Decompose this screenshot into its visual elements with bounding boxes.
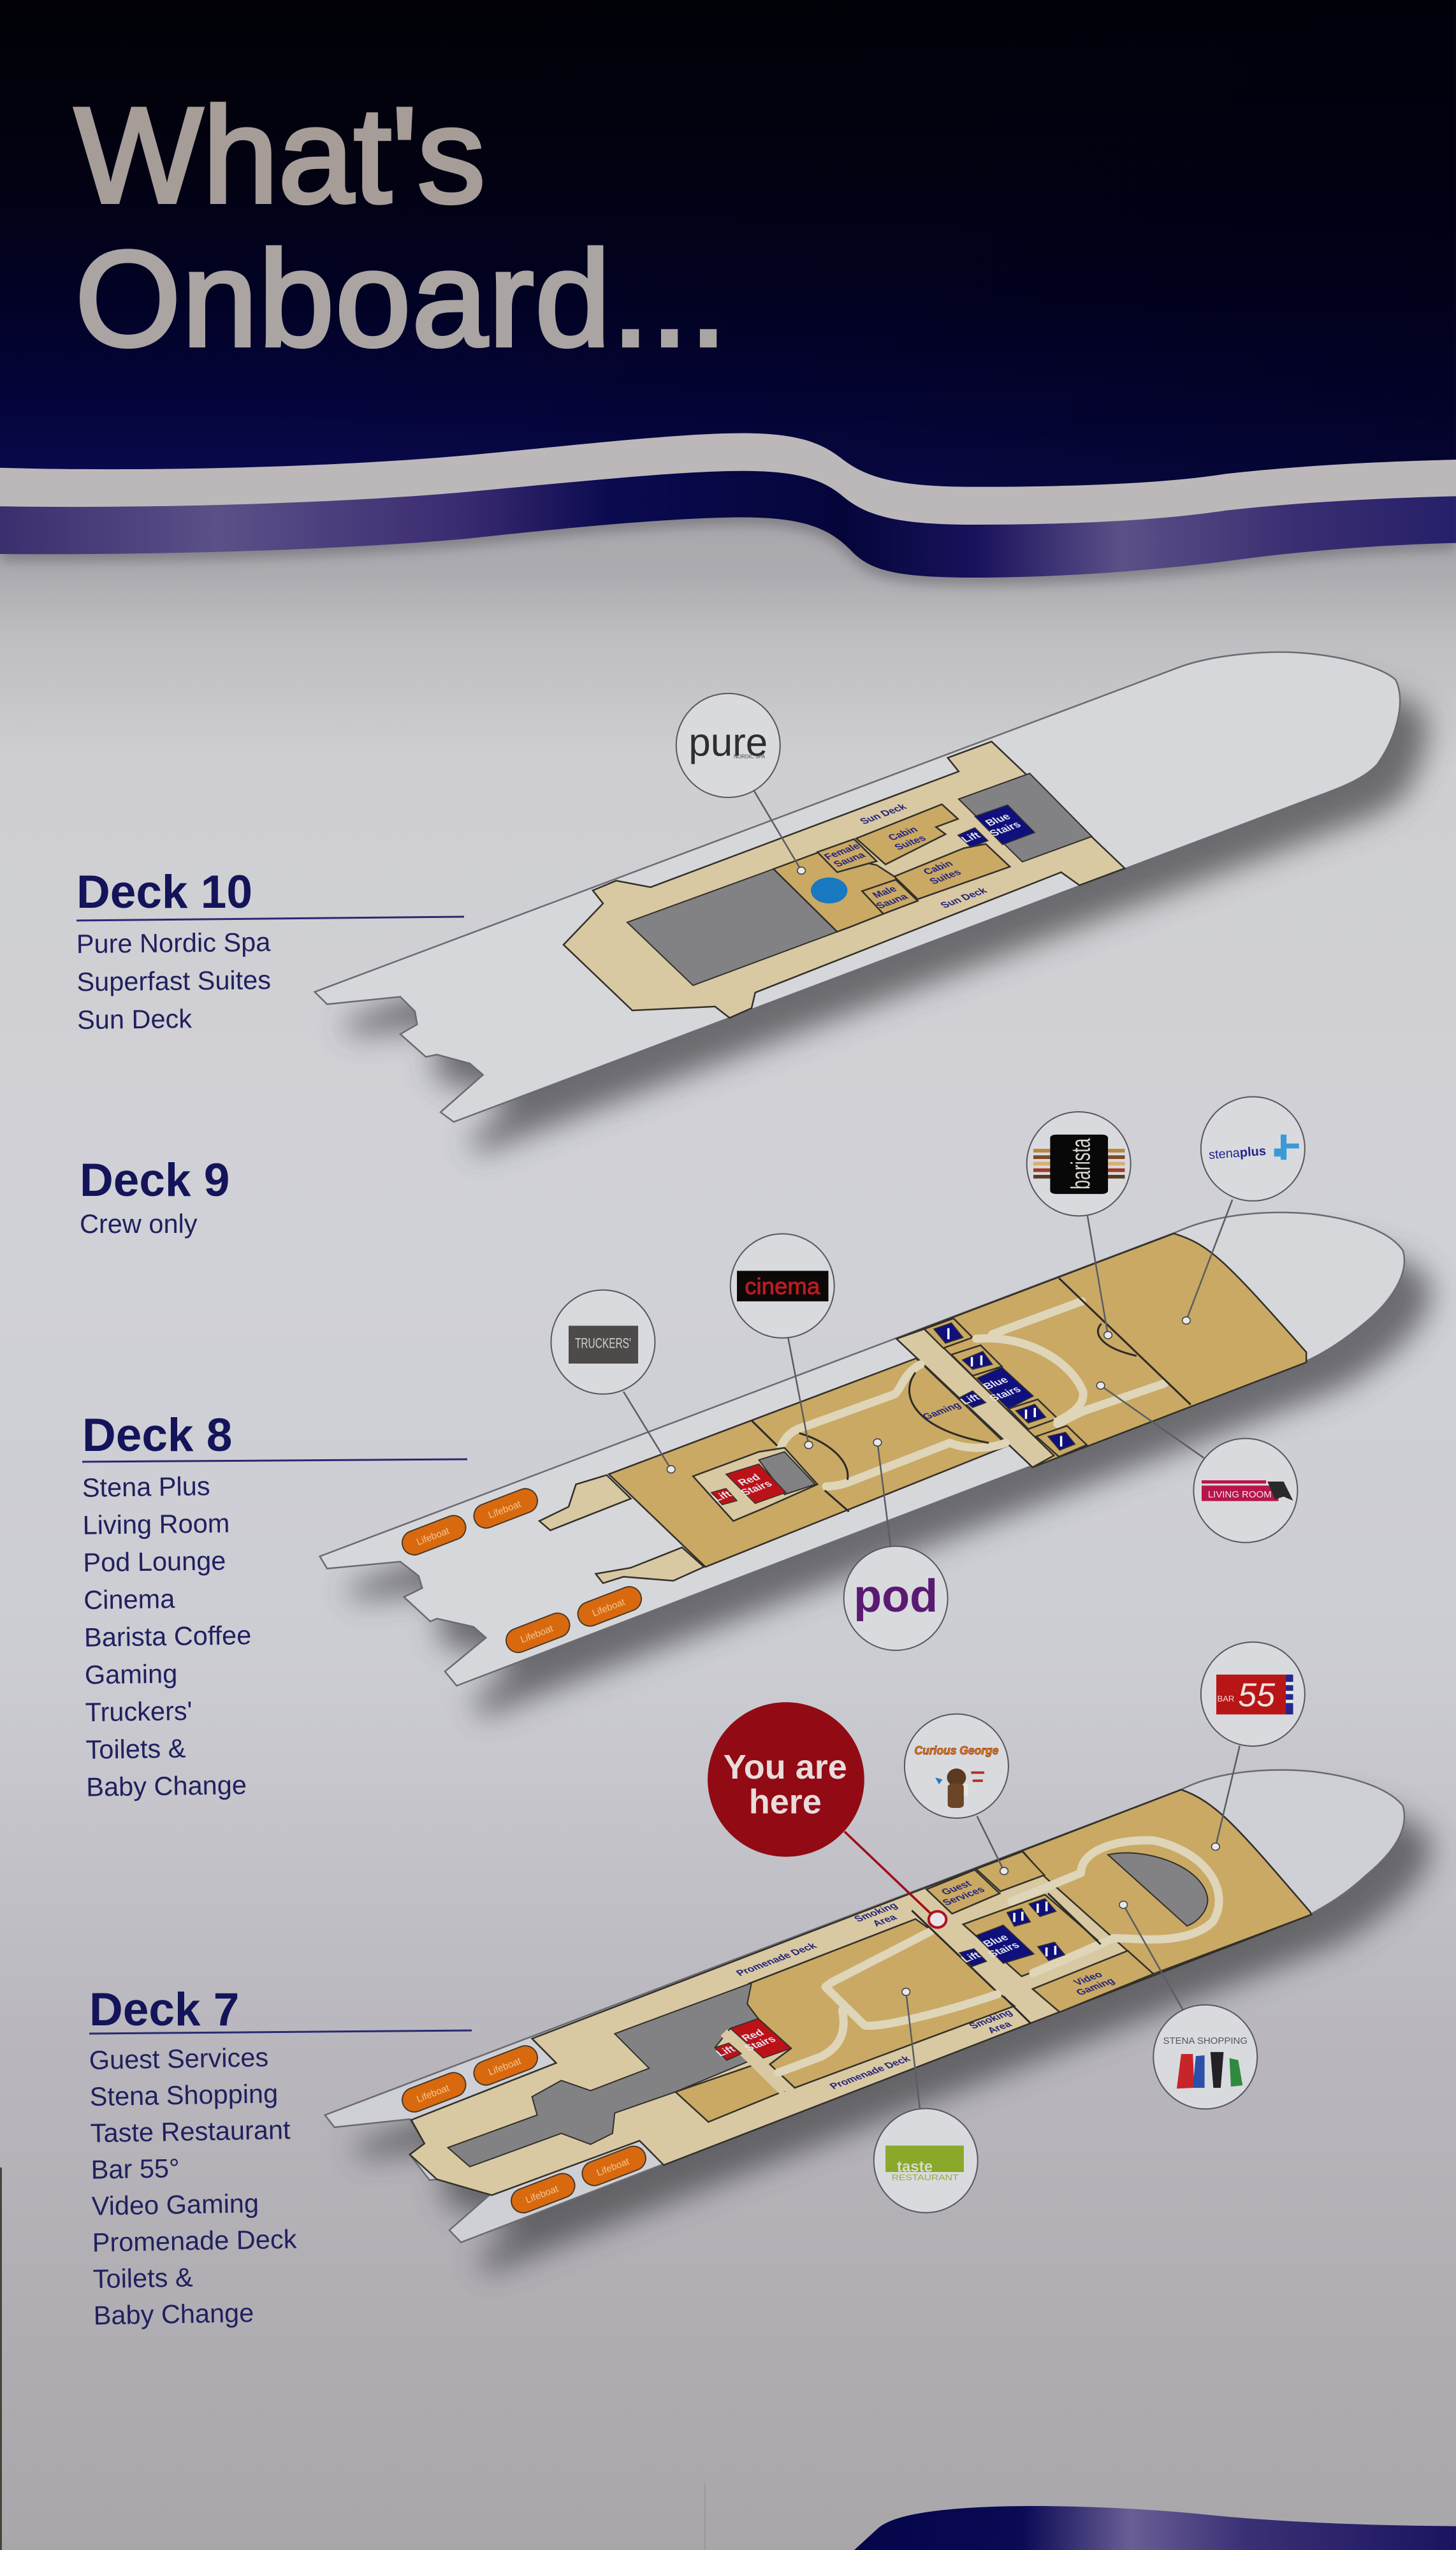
red stairs: Stairs (741, 2034, 778, 2053)
room: cabin suites upper: Cabin (886, 825, 921, 843)
room: female sauna (817, 839, 877, 872)
callout: stena plus: stenaplus (1208, 1144, 1267, 1162)
room: cabin suites upper: Suites (892, 834, 929, 852)
walkways (781, 1301, 1164, 1487)
list: Deck 8 facilities: Gaming (85, 1658, 178, 1689)
lifeboat 4 (574, 1583, 645, 1629)
callout: curious george (905, 1714, 1008, 1818)
heading: Deck 9: Deck 9 (80, 1155, 229, 1206)
icon: toilets 2 (963, 1352, 993, 1369)
icon: toilets 1 (934, 1323, 963, 1343)
void (448, 1983, 758, 2167)
room: curious george (976, 1851, 1044, 1891)
label: sun deck north: Sun Deck (858, 803, 909, 826)
callout: barista: barista (1065, 1138, 1095, 1190)
void: main (627, 869, 837, 986)
leader: pure (753, 790, 801, 871)
list: Deck 8 facilities: Toilets & (85, 1733, 186, 1765)
lifeboat 4 (579, 2143, 650, 2189)
blue stairs (977, 1367, 1033, 1409)
callout: pod (844, 1546, 948, 1650)
blue stairs (975, 805, 1035, 845)
list: Deck 7 facilities: Taste Restaurant (90, 2115, 291, 2148)
blue stairs: Stairs (986, 1940, 1022, 1959)
callout: you are here: here (749, 1782, 822, 1821)
cross corridor (896, 1329, 1054, 1468)
leader lines (906, 1745, 1240, 2109)
callout: you are here: You are (724, 1748, 847, 1786)
deck structure (410, 1789, 1311, 2195)
label: promenade deck north: Promenade Deck (734, 1941, 819, 1978)
list: Deck 7 facilities: Stena Shopping (89, 2078, 278, 2111)
lifeboat 2 (470, 2043, 541, 2088)
heading: Deck 8: Deck 8 (82, 1410, 232, 1461)
callout: stena plus (1201, 1096, 1305, 1201)
lifeboat 1: Lifeboat (415, 1526, 451, 1548)
room: male sauna: Male (870, 885, 899, 900)
list: Deck 8 facilities: Cinema (84, 1584, 175, 1615)
lifeboat 3: Lifeboat (524, 2183, 560, 2206)
lifeboat 1 (398, 2069, 469, 2115)
list: Deck 8 facilities: Truckers' (85, 1696, 193, 1727)
list: Deck 7 facilities: Video Gaming (91, 2188, 259, 2221)
red stairs: Red (739, 2027, 767, 2043)
lifeboat 3 (507, 2170, 578, 2217)
deck 7 plan (325, 1642, 1431, 2273)
callout: stena shopping (1153, 2005, 1257, 2109)
red stairs (731, 2019, 791, 2058)
lift: Lift (959, 1950, 983, 1964)
lifeboat 1: Lifeboat (415, 2082, 451, 2105)
callout: bar 55: BAR (1218, 1694, 1234, 1703)
lift (958, 827, 988, 847)
blue stairs: Stairs (987, 1384, 1024, 1403)
icon: toilets 3 (1016, 1404, 1045, 1423)
room: guest services: Guest (939, 1879, 975, 1897)
list: Deck 10 facilities: Pure Nordic Spa (76, 927, 271, 959)
list: Deck 7 facilities: Toilets & (92, 2262, 193, 2294)
list: Deck 10 facilities: Superfast Suites (76, 965, 271, 996)
room: guest services (926, 1870, 1000, 1914)
list: Deck 7 facilities: Baby Change (93, 2298, 254, 2330)
label: smoking area south: Area (986, 2020, 1014, 2036)
icon: toilets 2 (1029, 1898, 1056, 1916)
callout: curious george: Curious George (914, 1744, 998, 1757)
title: Onboard... (75, 223, 728, 375)
void: forward (959, 773, 1092, 862)
list: Deck 8 facilities: Stena Plus (82, 1471, 210, 1503)
icon: toilets 1 (1007, 1909, 1030, 1927)
red stairs (726, 1464, 786, 1503)
toilet boxes (924, 1318, 1087, 1457)
lift: Lift (958, 1392, 982, 1406)
callout: bar 55 (1201, 1642, 1305, 1746)
lifeboat 2: Lifeboat (487, 2055, 523, 2078)
aft deck side upper (539, 1475, 631, 1531)
partitions (752, 1278, 1191, 1512)
walkways (778, 1840, 1219, 2073)
room: video gaming (1033, 1951, 1153, 2012)
room: male sauna: Sauna (874, 892, 910, 910)
title (75, 80, 728, 375)
leader lines (623, 1200, 1232, 1547)
callout: bar 55: 55 (1238, 1677, 1276, 1714)
lifeboat 3: Lifeboat (519, 1623, 555, 1645)
list: Deck 8 facilities: Barista Coffee (84, 1620, 252, 1652)
blue stairs (975, 1925, 1034, 1963)
red lift: Lift (713, 2044, 738, 2058)
red stairs: Red (735, 1472, 763, 1488)
room: female sauna: Female (822, 841, 863, 862)
room: guest services: Services (940, 1885, 987, 1907)
room: video gaming: Video (1072, 1970, 1105, 1988)
markers (902, 1843, 1219, 1995)
markers (667, 1317, 1190, 1473)
floor forward (896, 1234, 1306, 1468)
callout: pod: pod (854, 1571, 938, 1622)
room: cabin suites lower (894, 844, 1010, 900)
callout: you are here (708, 1702, 946, 1928)
room: female sauna: Sauna (832, 850, 868, 869)
icon: spa pool (811, 877, 847, 903)
heading: Deck 10: Deck 10 (76, 866, 252, 918)
floor: restaurant (747, 1919, 1014, 2088)
list: Deck 10 facilities: Sun Deck (77, 1003, 193, 1035)
deck 10 plan (315, 652, 1427, 1153)
blue stairs: Stairs (987, 819, 1024, 838)
heading: Deck 7: Deck 7 (89, 1984, 239, 2036)
room: video gaming: Gaming (1074, 1976, 1117, 1997)
lifeboat 4: Lifeboat (591, 1596, 627, 1619)
icon: toilets 3 (1038, 1942, 1065, 1960)
blue stairs: Blue (982, 812, 1013, 828)
aft deck side lower (595, 1547, 704, 1583)
red stairs: Stairs (738, 1478, 775, 1497)
header band (0, 0, 1456, 585)
callout: pure: pure (688, 721, 768, 765)
floor: lower block (676, 2064, 783, 2122)
hull: deck 7 (325, 1770, 1404, 2242)
label: promenade deck south: Promenade Deck (827, 2055, 913, 2091)
label: smoking area north: Smoking (852, 1901, 900, 1924)
lifeboat 3 (502, 1610, 573, 1656)
callout: truckers (551, 1290, 655, 1394)
blue stairs: Blue (980, 1374, 1011, 1392)
callout: taste restaurant (874, 2109, 978, 2213)
toilet block (963, 1895, 1102, 1976)
deck 8 plan (320, 1096, 1431, 1716)
list: Deck 7 facilities: Bar 55° (91, 2153, 180, 2185)
callout: living room: LIVING ROOM (1208, 1489, 1272, 1500)
callout: taste restaurant: RESTAURANT (892, 2173, 959, 2182)
title: What's (75, 80, 485, 231)
bottom ribbon (854, 2506, 1456, 2550)
void: bow half circle (1108, 1853, 1207, 1926)
room: cabin suites lower: Suites (928, 868, 964, 886)
spa floor (773, 853, 916, 932)
callout: cinema (731, 1234, 834, 1338)
list: Deck 8 facilities: Pod Lounge (83, 1545, 226, 1577)
lifeboat 2 (470, 1485, 541, 1531)
red lift: Lift (710, 1489, 734, 1503)
callout: living room (1193, 1438, 1297, 1543)
callout: stena shopping: STENA SHOPPING (1163, 2036, 1248, 2046)
list: Deck 8 facilities: Baby Change (86, 1770, 247, 1802)
marker: pure (797, 867, 805, 874)
label: smoking area north: Area (870, 1913, 899, 1928)
callout: barista (1027, 1112, 1131, 1216)
room: cabin suites upper (856, 805, 958, 864)
list: Deck 8 facilities: Living Room (82, 1508, 230, 1540)
label: sun deck south: Sun Deck (938, 886, 989, 910)
partitions (912, 1893, 1101, 2023)
callout: cinema: cinema (745, 1273, 820, 1299)
hull: deck 8 (320, 1213, 1404, 1686)
icon: toilets 4 (1048, 1432, 1075, 1450)
lifeboat 1 (398, 1512, 469, 1559)
label: smoking area south: Smoking (967, 2008, 1015, 2031)
label: gaming: Gaming (921, 1401, 964, 1422)
floor: bow (1023, 1789, 1311, 1974)
hull: deck 10 (315, 652, 1400, 1122)
lift: Lift (959, 830, 983, 845)
text: crew only: Crew only (80, 1209, 198, 1239)
callout: truckers: TRUCKERS' (575, 1336, 631, 1352)
lifeboat 4: Lifeboat (595, 2156, 631, 2178)
core: void (759, 1452, 815, 1494)
lifeboat 2: Lifeboat (487, 1498, 523, 1521)
room: cabin suites lower: Cabin (921, 859, 956, 877)
deck structure (564, 741, 1125, 1018)
room: male sauna (862, 880, 918, 914)
beige bar (724, 2032, 783, 2092)
blue stairs: Blue (980, 1932, 1011, 1949)
core: beige (693, 1448, 817, 1521)
list: Deck 7 facilities: Promenade Deck (92, 2224, 297, 2257)
callout: taste restaurant: taste (897, 2158, 933, 2175)
floor aft (609, 1359, 1008, 1567)
list: Deck 7 facilities: Guest Services (89, 2042, 269, 2075)
callout: pure: NORDIC SPA (734, 754, 766, 760)
callout: pure (676, 694, 780, 798)
